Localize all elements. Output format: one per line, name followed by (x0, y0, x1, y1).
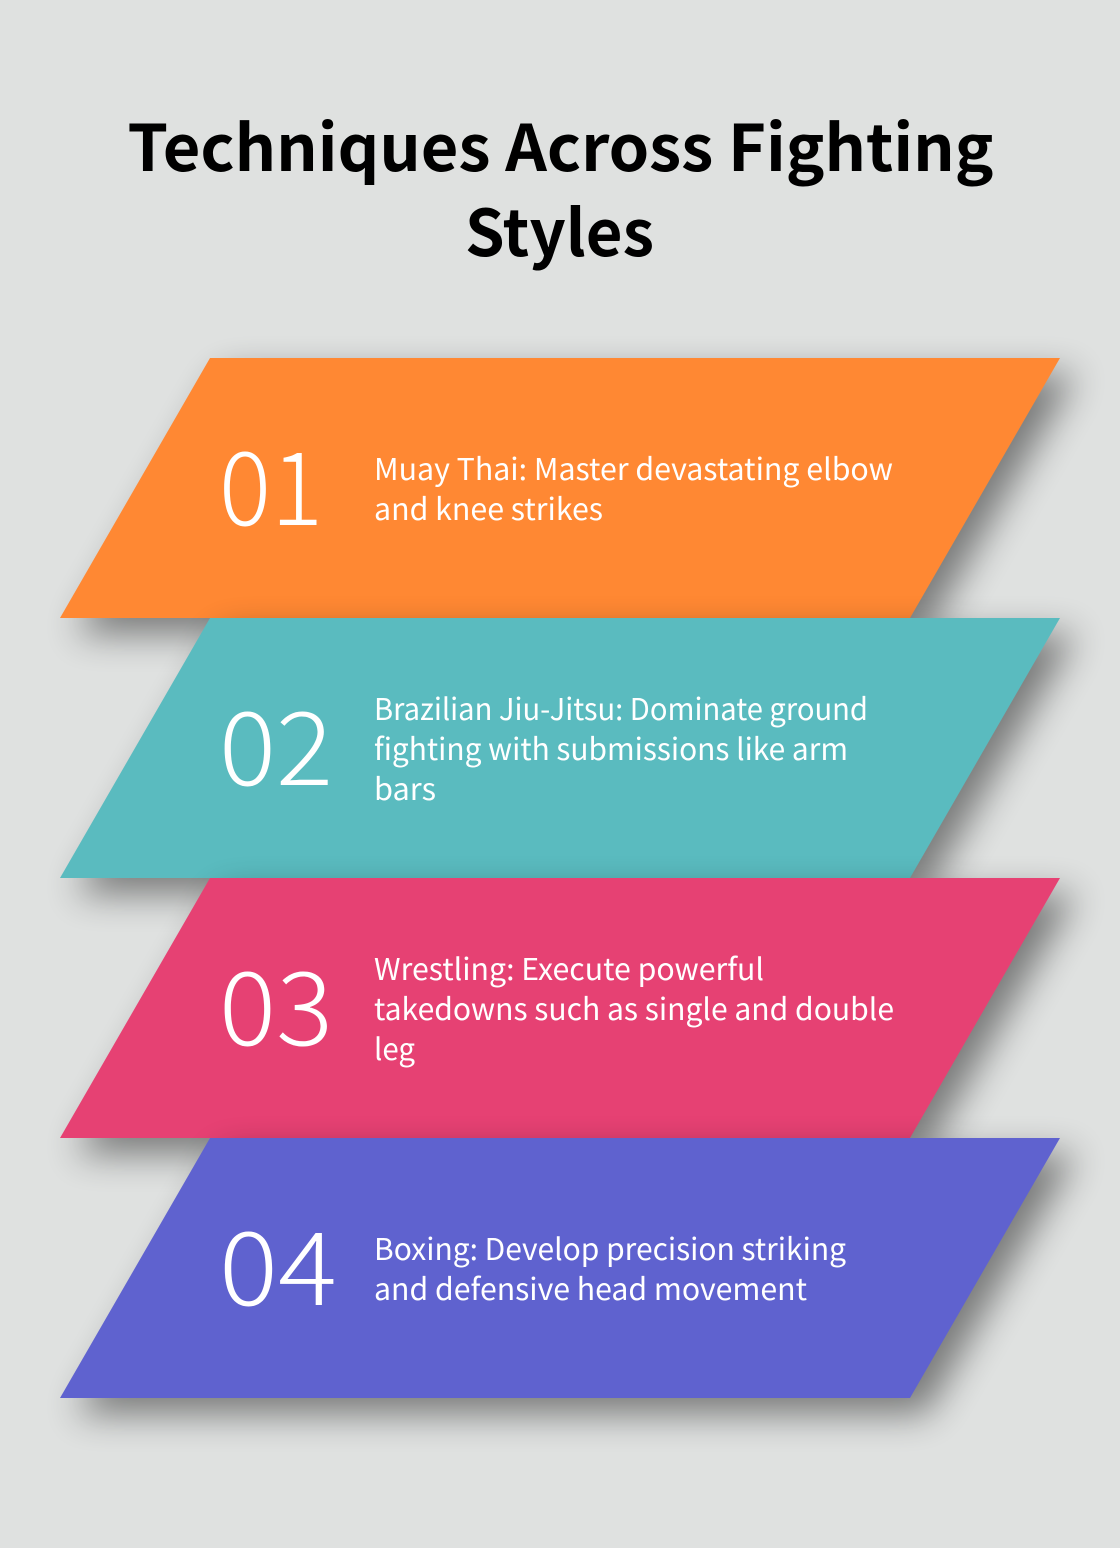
text: Brazilian Jiu-Jitsu: fighting with submissions like arm (374, 725, 848, 769)
number 02: 02 (219, 668, 333, 815)
text: Wrestling: Wrestling: Execute powerful (374, 945, 764, 989)
text: Muay Thai: and knee strikes (374, 485, 603, 529)
number 04: 04 (219, 1188, 337, 1335)
panel: Boxing (60, 1138, 1060, 1398)
text: Muay Thai (374, 445, 893, 529)
title (128, 98, 994, 275)
band: orange (60, 358, 1060, 618)
band: indigo (60, 1138, 1060, 1398)
title: Styles (465, 183, 654, 275)
text: Boxing: Boxing: Develop precision striking (374, 1225, 846, 1269)
text: Wrestling: leg (374, 1025, 415, 1069)
text: Wrestling: takedowns such as single and double (374, 985, 894, 1029)
text: Brazilian Jiu-Jitsu (374, 685, 868, 809)
text: Brazilian Jiu-Jitsu: bars (374, 765, 436, 809)
text: Boxing: and defensive head movement (374, 1265, 807, 1309)
number 01: 01 (219, 408, 323, 555)
panel: Wrestling (60, 878, 1060, 1138)
panel: Muay Thai (60, 358, 1060, 618)
band: teal (60, 618, 1060, 878)
number 03: 03 (219, 928, 333, 1075)
text: Muay Thai: Muay Thai: Master devastating elbow (374, 445, 893, 489)
text: Brazilian Jiu-Jitsu: Brazilian Jiu-Jitsu: Dominate ground (374, 685, 868, 729)
title: Techniques Across Fighting (128, 98, 994, 190)
band: pink (60, 878, 1060, 1138)
text: Wrestling (374, 945, 894, 1069)
panel: Brazilian Jiu-Jitsu (60, 618, 1060, 878)
text: Boxing (374, 1225, 846, 1309)
